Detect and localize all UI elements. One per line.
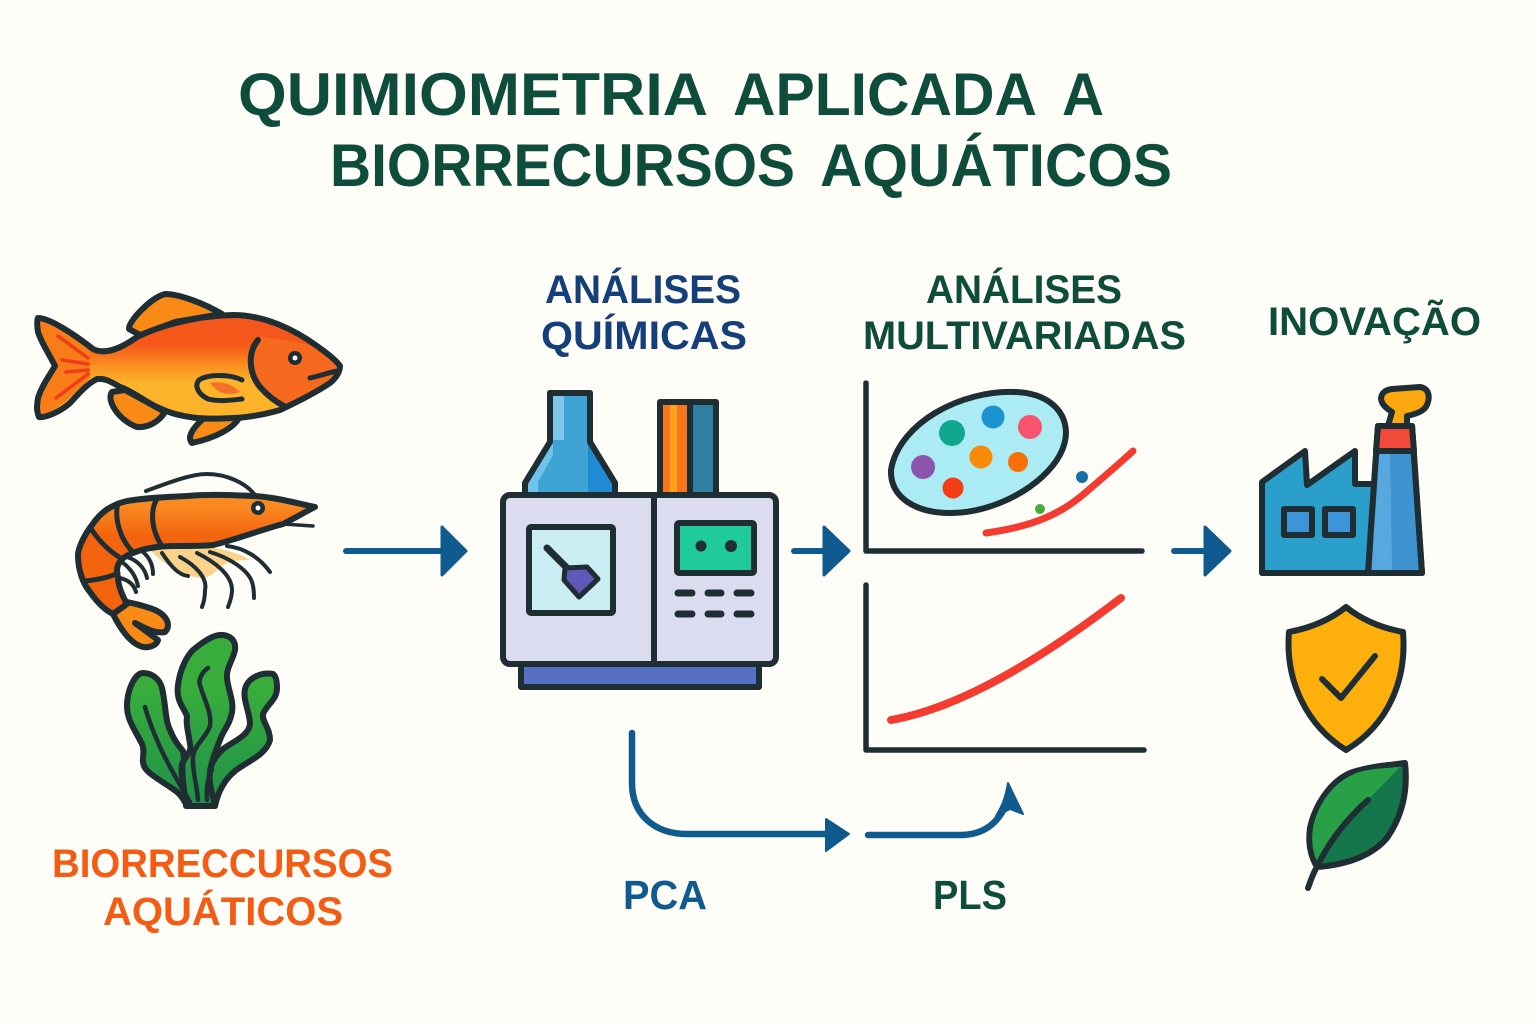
label: PCA: PCA (623, 872, 707, 918)
icon: leaf (1308, 763, 1406, 888)
title (238, 61, 1172, 199)
heading: análises multivariadas: ANÁLISES (926, 267, 1122, 312)
arrow: PCA curve (632, 733, 849, 851)
icon: factory (1262, 387, 1429, 573)
heading: análises multivariadas: MULTIVARIADAS (863, 314, 1186, 358)
heading: análises químicas (541, 267, 747, 358)
title: APLICADA (733, 61, 1037, 128)
label: biorrecursos: BIORRECCURSOS (52, 842, 393, 886)
icon: shrimp (78, 474, 315, 647)
arrow: multivariate to innovation (1174, 527, 1230, 575)
title: BIORRECURSOS (330, 132, 795, 199)
title: AQUÁTICOS (820, 132, 1172, 199)
label: PLS: PLS (933, 872, 1007, 918)
title: QUIMIOMETRIA (238, 61, 708, 128)
icon: laboratory instrument (503, 393, 776, 687)
title: A (1062, 61, 1104, 128)
chart: PLS regression (866, 585, 1144, 750)
heading: análises multivariadas (863, 267, 1186, 358)
icon: seaweed (127, 635, 277, 806)
icon: flask (525, 393, 615, 497)
arrow: PLS curve (868, 783, 1023, 835)
arrow: instrument to multivariate (794, 527, 849, 575)
arrow: biorrecursos to chemical analysis (346, 527, 466, 575)
icon: fish (37, 294, 340, 443)
label: biorrecursos: AQUÁTICOS (103, 889, 343, 934)
heading: análises químicas: QUÍMICAS (541, 313, 747, 358)
heading: inovação: INOVAÇÃO (1268, 298, 1481, 344)
icon: shield (1289, 607, 1404, 750)
heading: análises químicas: ANÁLISES (545, 267, 741, 312)
label: biorrecursos (52, 842, 393, 934)
chart: PCA scatter (866, 383, 1142, 551)
icon: reagent column (660, 402, 716, 496)
